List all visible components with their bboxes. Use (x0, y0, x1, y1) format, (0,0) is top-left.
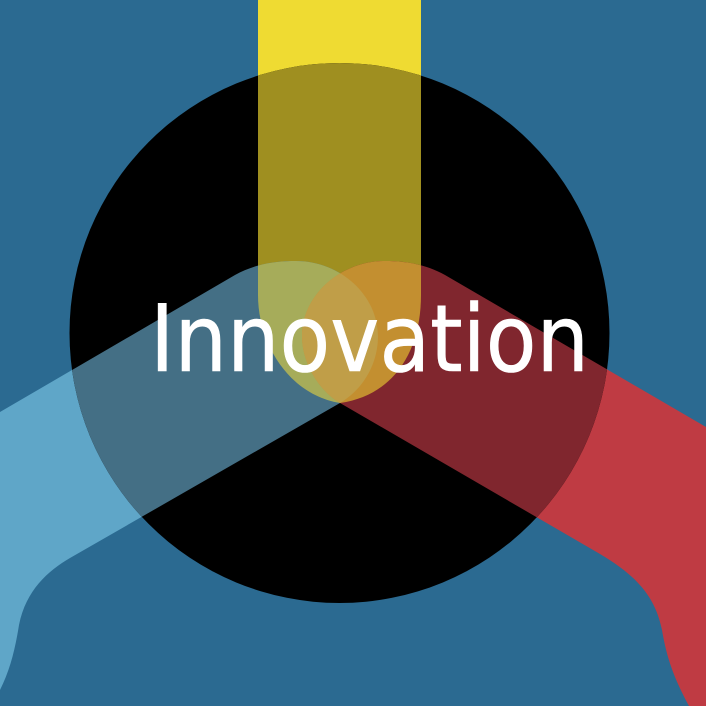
arm: yellow band from top (258, 0, 421, 403)
yellow and blue overlap (258, 261, 340, 403)
arm: light blue band from lower left (0, 261, 378, 690)
red band inside circle (340, 261, 607, 518)
arm overlaps inside circle (72, 63, 607, 518)
triple overlap lens (302, 274, 378, 403)
black central circle (70, 63, 610, 603)
title: Innovation (150, 285, 589, 393)
yellow and red overlap (302, 261, 421, 403)
arm: red band from lower right (302, 261, 706, 706)
blue band inside circle (72, 261, 340, 517)
yellow band inside circle (258, 63, 421, 274)
